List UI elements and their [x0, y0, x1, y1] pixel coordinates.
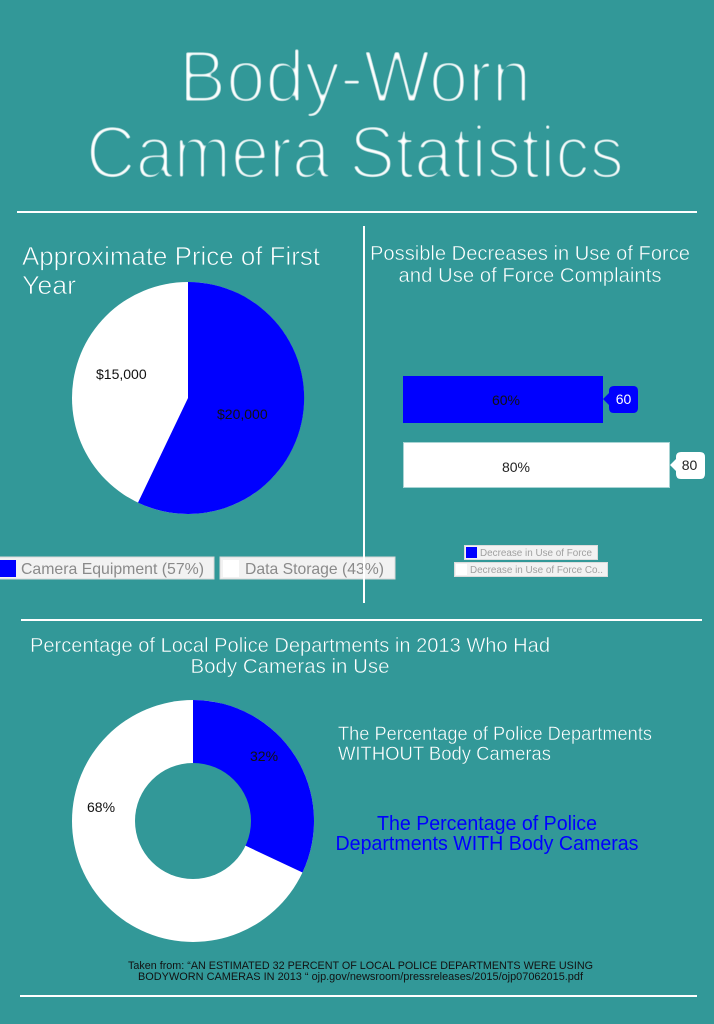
heading: approximate price: Year — [22, 270, 76, 300]
bar: decrease in complaints: 80 — [682, 457, 697, 473]
bar: decrease in use of force: 60% — [492, 392, 520, 408]
heading: percentage of local police departments: Body Cameras in Use — [190, 656, 390, 678]
label: without body cameras: The Percentage of Police Departments — [338, 724, 652, 745]
legend: price: Data Storage (43%) — [245, 561, 384, 578]
pie chart: price: $20,000 — [217, 406, 268, 422]
bar: decrease in complaints — [404, 442, 705, 488]
donut chart: 68% — [87, 799, 115, 815]
title — [86, 35, 624, 194]
legend: price: Camera Equipment (57%) — [21, 561, 204, 578]
heading: approximate price: Approximate Price of First — [22, 241, 321, 271]
label: without body cameras — [338, 724, 652, 765]
heading: possible decreases — [370, 243, 690, 287]
panel: local police departments — [30, 635, 652, 983]
title: Body-Worn — [179, 35, 531, 118]
legend: decreases: Decrease in Use of Force — [480, 548, 592, 559]
label: with body cameras — [336, 813, 638, 855]
heading: percentage of local police departments — [30, 635, 550, 678]
pie chart: price: $15,000 — [96, 366, 147, 382]
panel: possible decreases in use of force — [370, 243, 705, 576]
label: without body cameras: WITHOUT Body Cameras — [338, 744, 551, 765]
bar: decrease in use of force: 60 — [616, 391, 631, 407]
legend: decreases: Decrease in Use of Force Co.. — [470, 565, 603, 576]
source citation: Taken from: “AN ESTIMATED 32 PERCENT OF LOCAL POLICE DEPARTMENTS WERE USING — [128, 960, 593, 972]
bar: decrease in complaints: 80% — [502, 459, 530, 475]
legend: decreases — [454, 546, 608, 576]
heading: possible decreases: and Use of Force Complaints — [398, 265, 662, 287]
panel: approximate price of first year — [0, 241, 395, 579]
heading: percentage of local police departments: Percentage of Local Police Departments in 2013 Who Had — [30, 635, 550, 657]
heading: possible decreases: Possible Decreases in Use of Force — [370, 243, 690, 265]
donut chart — [72, 700, 314, 942]
source citation: BODYWORN CAMERAS IN 2013 “ ojp.gov/newsroom/pressreleases/2015/ojp07062015.pdf — [138, 971, 584, 983]
label: with body cameras: Departments WITH Body Cameras — [336, 833, 638, 855]
heading: approximate price — [22, 241, 321, 300]
source citation — [128, 960, 593, 983]
title: Camera Statistics — [86, 111, 624, 194]
legend: price — [0, 557, 395, 579]
pie chart: price — [72, 282, 304, 514]
label: with body cameras: The Percentage of Police — [377, 813, 597, 835]
donut chart: 32% — [250, 748, 278, 764]
bar: decrease in use of force — [403, 376, 638, 423]
